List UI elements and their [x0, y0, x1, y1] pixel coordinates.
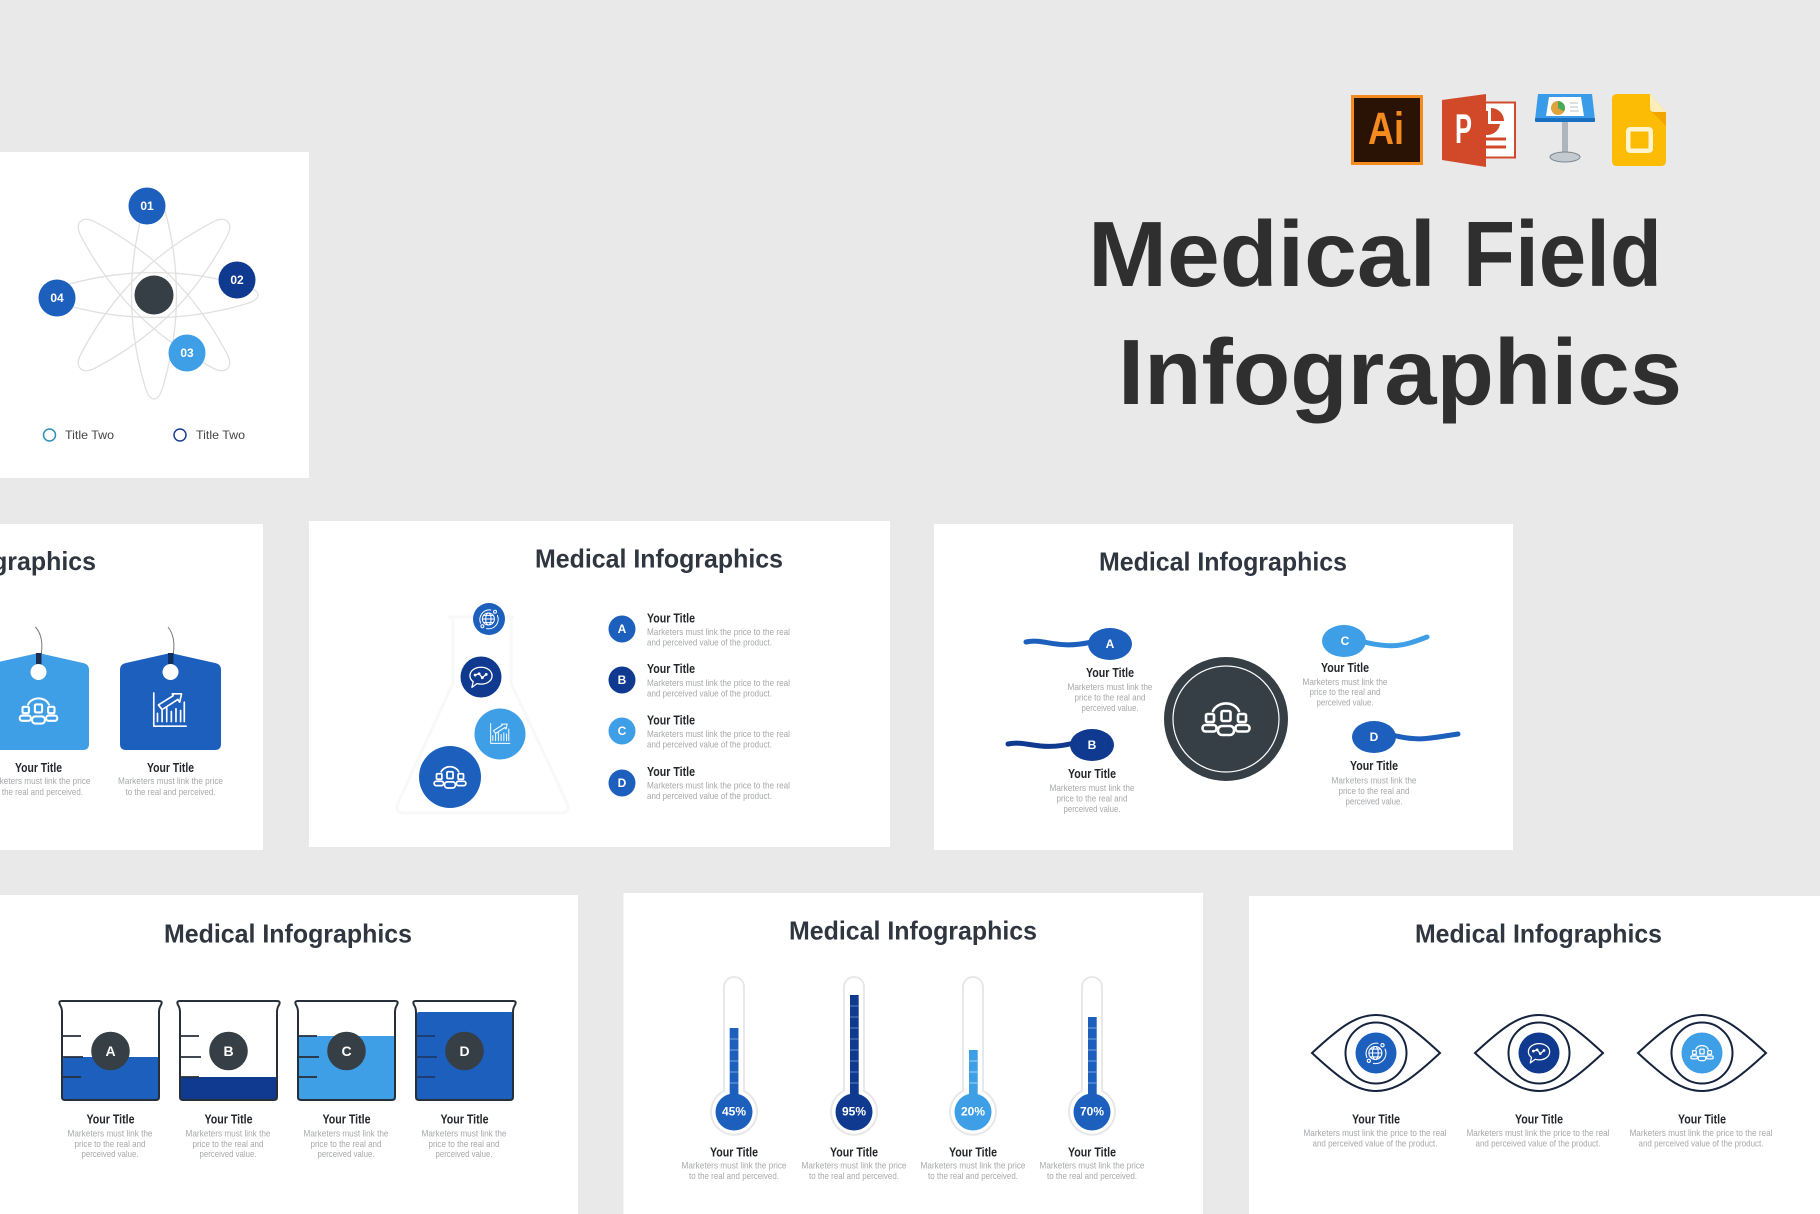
main title: [1088, 202, 1682, 424]
beaker D: [413, 1001, 516, 1160]
node 04: 04: [50, 291, 64, 305]
thermometer 70%: [1040, 977, 1144, 1182]
beaker B: [177, 1001, 280, 1160]
icon: Adobe Illustrator: [1352, 96, 1422, 164]
thermometer 45%: Marketers must link the price: [682, 1160, 786, 1172]
thermometer 45%: Your Title: [710, 1146, 758, 1160]
list item D: Your Title: [647, 765, 695, 779]
panel: thermometers: [624, 893, 1203, 1214]
legend item two: Title Two: [196, 428, 245, 442]
node 01: 01: [140, 199, 154, 213]
eye one: Marketers must link the price to the real: [1304, 1128, 1446, 1139]
eye one: [1304, 1015, 1446, 1150]
main title: Infographics: [1118, 320, 1682, 424]
cell A: Marketers must link the: [1068, 682, 1152, 693]
cell D: price to the real and: [1338, 786, 1410, 797]
node 03: [168, 334, 206, 372]
panel: flask: [309, 521, 890, 847]
heading: Medical Infographics: [535, 544, 783, 574]
thermometer 45%: [682, 977, 786, 1182]
flask bubble: people: [419, 746, 481, 808]
cell A: A: [1106, 637, 1115, 651]
thermometer 20%: Your Title: [949, 1146, 997, 1160]
beaker A: A: [105, 1043, 116, 1059]
node 02: 02: [230, 273, 244, 287]
beaker B: perceived value.: [200, 1149, 256, 1160]
tag one: Your Title: [15, 761, 62, 775]
cell C: [1302, 625, 1427, 708]
heading: Medical Infographics: [789, 916, 1037, 946]
beaker B: Your Title: [204, 1112, 253, 1126]
cell B: price to the real and: [1056, 794, 1128, 804]
thermometer 95%: Your Title: [830, 1146, 878, 1160]
cell B: Marketers must link the: [1050, 783, 1134, 794]
thermometer 70%: Marketers must link the price: [1040, 1160, 1144, 1172]
cell C: Marketers must link the: [1302, 677, 1388, 688]
beaker C: price to the real and: [310, 1139, 382, 1150]
list item A: Marketers must link the price to the real: [647, 627, 790, 638]
thermometer 95%: 95%: [842, 1104, 866, 1118]
icon: PowerPoint: [1442, 94, 1515, 167]
beaker C: Marketers must link the: [304, 1128, 388, 1140]
cell B: perceived value.: [1064, 804, 1120, 815]
beaker D: Marketers must link the: [422, 1128, 506, 1140]
node 04: [38, 280, 76, 316]
cell A: [1026, 628, 1152, 714]
beaker B: Marketers must link the: [186, 1128, 270, 1140]
cell A: perceived value.: [1082, 703, 1138, 714]
eye two: [1466, 1015, 1610, 1150]
beaker D: Your Title: [440, 1112, 489, 1126]
panel: price tags: [0, 524, 263, 850]
cell A: Your Title: [1086, 666, 1134, 680]
cell D: Your Title: [1350, 759, 1398, 773]
cell C: perceived value.: [1316, 698, 1374, 708]
beaker C: C: [341, 1043, 352, 1059]
list item A: [608, 612, 790, 648]
list item B: and perceived value of the product.: [647, 688, 772, 700]
beaker A: price to the real and: [74, 1139, 146, 1150]
eye three: Marketers must link the price to the real: [1630, 1128, 1772, 1139]
thermometer 20%: 20%: [961, 1104, 985, 1118]
thermometer 45%: to the real and perceived.: [689, 1171, 779, 1182]
eye two: Your Title: [1515, 1112, 1563, 1126]
cell B: [1008, 729, 1134, 815]
thermometer 95%: Marketers must link the price: [802, 1160, 906, 1172]
legend item one: Title Two: [65, 428, 114, 442]
eye three: [1630, 1015, 1772, 1150]
list item C: C: [618, 724, 627, 738]
panel: eyes: [1249, 896, 1820, 1214]
thermometer 20%: [920, 977, 1026, 1182]
beaker D: D: [459, 1043, 470, 1059]
eye three: Your Title: [1678, 1112, 1726, 1126]
cell C: Your Title: [1321, 661, 1369, 675]
eye two: Marketers must link the price to the real: [1466, 1128, 1610, 1139]
node 03: 03: [180, 346, 194, 360]
main title: Medical: [1088, 202, 1436, 306]
beaker B: price to the real and: [192, 1139, 264, 1150]
heading: Medical Infographics: [1099, 546, 1347, 576]
thermometer 45%: 45%: [722, 1104, 746, 1118]
beaker D: price to the real and: [428, 1139, 500, 1150]
list item A: Your Title: [647, 612, 695, 626]
cell D: D: [1370, 730, 1379, 744]
cell C: price to the real and: [1310, 687, 1380, 698]
beaker C: Your Title: [322, 1112, 371, 1126]
panel: cells: [934, 524, 1513, 850]
atom orbits: [50, 191, 258, 399]
thermometer 70%: Your Title: [1068, 1146, 1116, 1160]
thermometer 70%: to the real and perceived.: [1047, 1171, 1137, 1182]
flask bubble: chat: [460, 656, 502, 698]
tag two: Your Title: [147, 761, 194, 775]
list item D: Marketers must link the price to the real: [647, 780, 790, 792]
tag two: to the real and perceived.: [126, 787, 216, 798]
flask bubble: globe: [473, 603, 505, 635]
cell C: C: [1341, 634, 1350, 648]
list item A: and perceived value of the product.: [647, 638, 772, 648]
cell D: perceived value.: [1346, 796, 1402, 808]
tag two: [118, 627, 223, 798]
icon: Google Slides: [1612, 94, 1666, 166]
list item B: Your Title: [647, 662, 695, 676]
heading: Medical Infographics: [1415, 918, 1662, 948]
panel: atom diagram: [0, 152, 309, 478]
flask bubble: chart: [474, 708, 526, 760]
beaker C: perceived value.: [318, 1149, 374, 1160]
beaker A: Marketers must link the: [68, 1128, 152, 1140]
beaker A: Your Title: [86, 1112, 135, 1126]
beaker B: B: [223, 1043, 234, 1059]
list item B: [608, 662, 790, 700]
thermometer 95%: [802, 977, 906, 1182]
eye one: and perceived value of the product.: [1312, 1138, 1438, 1150]
cell D: Marketers must link the: [1332, 776, 1416, 786]
eye three: and perceived value of the product.: [1638, 1138, 1764, 1150]
legend item two: [174, 428, 245, 442]
list item B: Marketers must link the price to the real: [647, 678, 790, 689]
cell B: Your Title: [1068, 767, 1116, 781]
cell D: [1332, 721, 1458, 808]
central hub: [1164, 657, 1288, 781]
list item C: and perceived value of the product.: [647, 740, 772, 750]
icon: Adobe Illustrator: Ai: [1368, 103, 1404, 154]
software icons row: [1352, 94, 1666, 167]
tag one: [0, 627, 90, 798]
heading: Medical Infographics: [164, 918, 412, 948]
thermometer 70%: 70%: [1080, 1104, 1104, 1118]
tag two: Marketers must link the price: [118, 776, 223, 787]
list item D: D: [618, 776, 627, 790]
eye two: and perceived value of the product.: [1476, 1138, 1600, 1150]
cell B: B: [1088, 738, 1097, 752]
list item D: and perceived value of the product.: [647, 791, 772, 802]
node 02: [218, 262, 256, 298]
panel: beakers: [0, 895, 578, 1214]
icon: Keynote: [1535, 94, 1595, 162]
eye one: Your Title: [1352, 1112, 1400, 1126]
beaker A: perceived value.: [82, 1149, 138, 1160]
atom nucleus: [134, 276, 174, 314]
thermometer 20%: to the real and perceived.: [928, 1171, 1018, 1182]
main title: Field: [1463, 202, 1662, 306]
beaker C: [295, 1001, 398, 1160]
list item A: A: [618, 622, 627, 636]
list item D: [608, 765, 790, 802]
list item C: Marketers must link the price to the real: [647, 729, 790, 740]
icon: PowerPoint: P: [1455, 105, 1472, 152]
thermometer 20%: Marketers must link the price: [920, 1160, 1026, 1172]
list item C: Your Title: [647, 714, 695, 728]
thermometer 95%: to the real and perceived.: [809, 1171, 899, 1182]
beaker A: [59, 1001, 162, 1160]
legend item one: [44, 428, 114, 442]
flask outline: [397, 617, 568, 813]
node 01: [128, 188, 166, 224]
beaker D: perceived value.: [436, 1149, 492, 1160]
list item C: [608, 714, 790, 750]
cell A: price to the real and: [1074, 692, 1146, 704]
list item B: B: [618, 673, 627, 687]
